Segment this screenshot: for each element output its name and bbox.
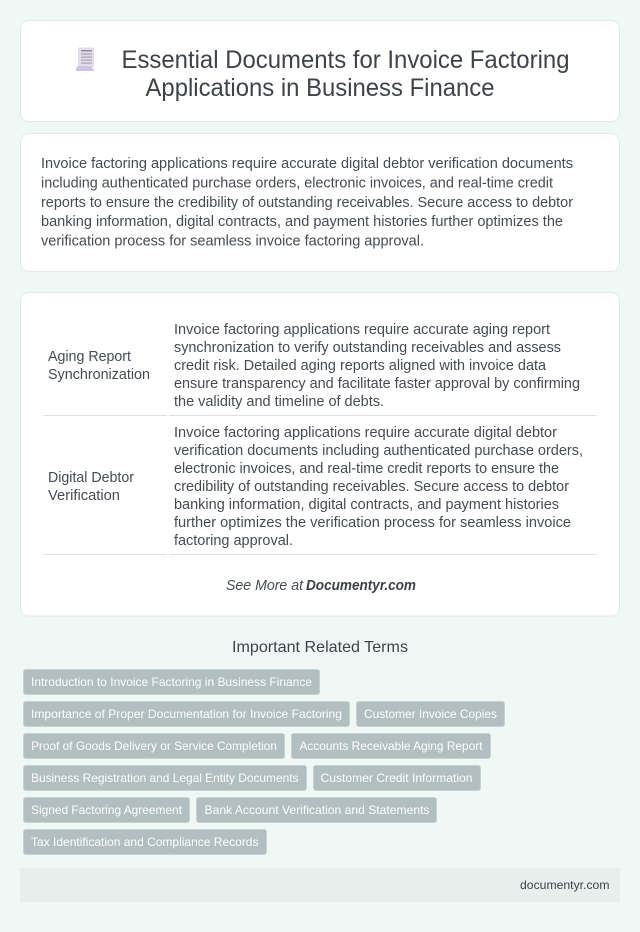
tag <box>24 670 320 694</box>
title <box>122 46 570 102</box>
tag: Introduction to Invoice Factoring in Business Finance <box>31 675 312 689</box>
tag <box>196 798 436 822</box>
row description: banking information, digital contracts, and payment histories <box>174 497 559 513</box>
tag <box>24 830 266 854</box>
panel: introduction <box>20 134 620 272</box>
tag: Tax Identification and Compliance Records <box>31 835 258 849</box>
panel: document table <box>20 292 620 616</box>
tag <box>24 798 190 822</box>
tag <box>24 702 350 726</box>
row description: credit risk. Detailed aging reports aligned with invoice data <box>174 358 546 374</box>
row description <box>174 425 583 549</box>
tag: Customer Credit Information <box>320 771 472 785</box>
row label: Aging Report <box>48 349 131 365</box>
row label: Synchronization <box>48 367 150 383</box>
intro text block: including authenticated purchase orders, electronic invoices, and real-time credit <box>41 176 553 192</box>
intro text block: verification process for seamless invoice factoring approval. <box>41 234 424 250</box>
row description: factoring approval. <box>174 533 293 549</box>
tag: Bank Account Verification and Statements <box>204 803 430 817</box>
tag <box>314 766 480 790</box>
tag: Business Registration and Legal Entity Documents <box>31 771 298 785</box>
intro text block <box>41 156 573 250</box>
see more link <box>226 578 416 594</box>
tag: Accounts Receivable Aging Report <box>300 739 483 753</box>
title: Applications in Business Finance <box>146 74 494 102</box>
row label <box>48 349 150 383</box>
intro text block: Invoice factoring applications require accurate digital debtor verification documents <box>41 156 573 172</box>
footer bar <box>20 868 620 902</box>
title: Essential Documents for Invoice Factoring <box>122 46 570 74</box>
row description: the validity and timeline of debts. <box>174 394 384 410</box>
table row: digital debtor verification <box>43 425 597 555</box>
tag <box>24 766 306 790</box>
footer text: documentyr.com <box>520 878 610 892</box>
row description: Invoice factoring applications require accurate digital debtor <box>174 425 557 441</box>
intro text block: reports to ensure the credibility of outstanding receivables. Secure access to debtor <box>41 195 573 211</box>
intro text block: banking information, digital contracts, and payment histories further optimizes the <box>41 214 563 230</box>
heading: important related terms: Important Related Terms <box>232 639 408 656</box>
see more link: Documentyr.com <box>306 578 416 594</box>
table row: aging report synchronization <box>43 322 597 416</box>
tag: Signed Factoring Agreement <box>31 803 183 817</box>
related terms tags <box>24 670 504 854</box>
panel: title header <box>20 20 620 122</box>
row description: Invoice factoring applications require accurate aging report <box>174 322 550 338</box>
row label: Verification <box>48 488 120 504</box>
tag: Proof of Goods Delivery or Service Completion <box>31 739 277 753</box>
row description <box>174 322 580 410</box>
row label: Digital Debtor <box>48 470 134 486</box>
row description: verification documents including authenticated purchase orders, <box>174 443 583 459</box>
see more link: See More at <box>226 578 304 594</box>
tag <box>356 702 504 726</box>
row description: ensure transparency and facilitate faster approval by confirming <box>174 376 580 392</box>
tag <box>24 734 284 758</box>
tag <box>292 734 490 758</box>
tag: Customer Invoice Copies <box>364 707 497 721</box>
icon: document receipt <box>76 48 94 71</box>
tag: Importance of Proper Documentation for Invoice Factoring <box>31 707 342 721</box>
row description: synchronization to verify outstanding receivables and assess <box>174 340 561 356</box>
row label <box>48 470 134 504</box>
row description: credibility of outstanding receivables. Secure access to debtor <box>174 479 569 495</box>
row description: electronic invoices, and real-time credit reports to ensure the <box>174 461 559 477</box>
row description: further optimizes the verification process for seamless invoice <box>174 515 571 531</box>
